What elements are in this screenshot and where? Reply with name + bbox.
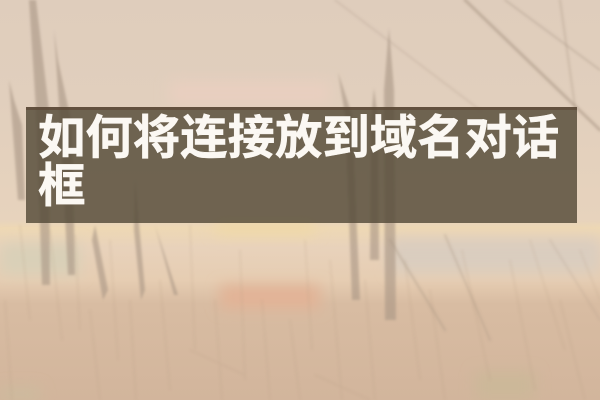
title panel [26, 107, 577, 223]
grass texture [5, 225, 600, 400]
title: 如何将连接放到域名对话框 [38, 112, 559, 213]
